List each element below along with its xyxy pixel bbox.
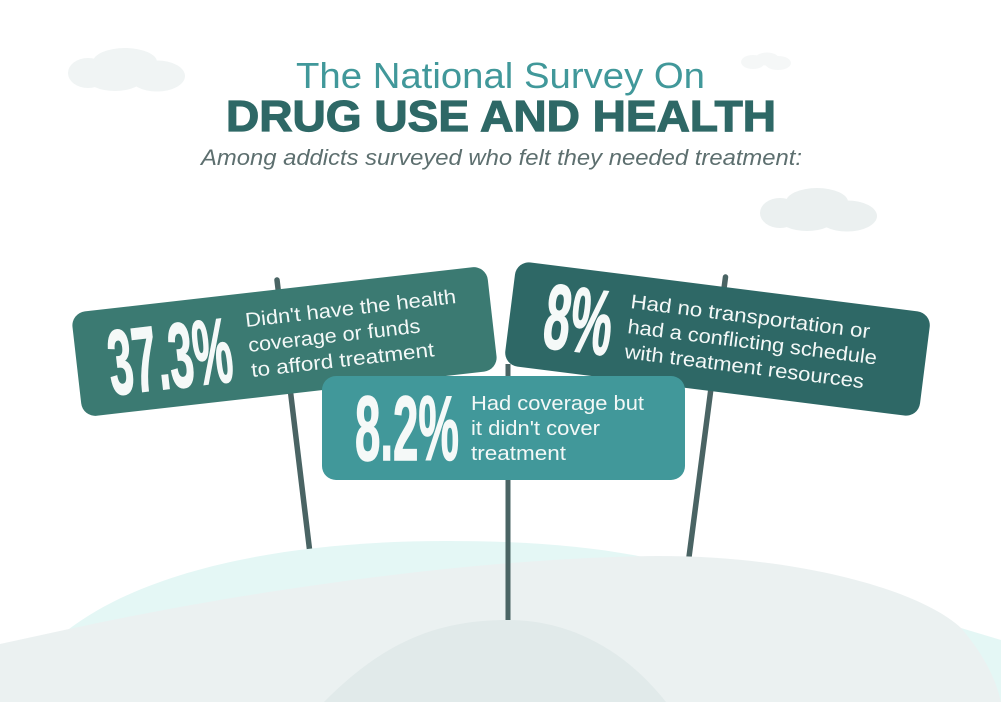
sign: 8.2 percent bbox=[322, 376, 685, 480]
post: left bbox=[277, 280, 312, 570]
description bbox=[471, 393, 644, 465]
sign: 8.2 percent: 8.2% bbox=[355, 378, 459, 480]
sign: 8 percent bbox=[504, 261, 931, 417]
sign panel bbox=[71, 266, 498, 417]
cloud: top left bbox=[68, 48, 185, 92]
post: centre bbox=[506, 364, 510, 620]
cloud: right bbox=[760, 188, 877, 232]
description bbox=[622, 291, 878, 393]
title: light line: The National Survey On bbox=[296, 55, 705, 96]
title: bold line: DRUG USE AND HEALTH bbox=[226, 92, 776, 141]
description bbox=[244, 286, 457, 382]
post: right bbox=[686, 277, 726, 580]
sign panel bbox=[322, 376, 685, 480]
sign: 37.3 percent bbox=[71, 266, 498, 417]
statistic: 8% bbox=[538, 266, 619, 375]
description: treatment bbox=[471, 443, 566, 465]
description: it didn't cover bbox=[471, 418, 600, 440]
hill: back cyan bbox=[69, 541, 1001, 702]
subtitle: Among addicts surveyed who felt they needed treatment: bbox=[199, 145, 802, 170]
sign: 37.3 percent: 37.3% bbox=[103, 299, 237, 415]
description: Had no transportation or bbox=[629, 291, 872, 343]
description: with treatment resources bbox=[622, 341, 865, 393]
description: to afford treatment bbox=[250, 339, 436, 382]
description: Had coverage but bbox=[471, 393, 644, 415]
hill: front grey bbox=[0, 556, 1001, 702]
description: Didn't have the health bbox=[244, 286, 457, 332]
description: coverage or funds bbox=[247, 316, 421, 357]
cloud: small top right bbox=[741, 52, 791, 70]
sign panel bbox=[504, 261, 931, 417]
hill: centre darker bbox=[324, 620, 666, 702]
description: had a conflicting schedule bbox=[626, 316, 878, 369]
